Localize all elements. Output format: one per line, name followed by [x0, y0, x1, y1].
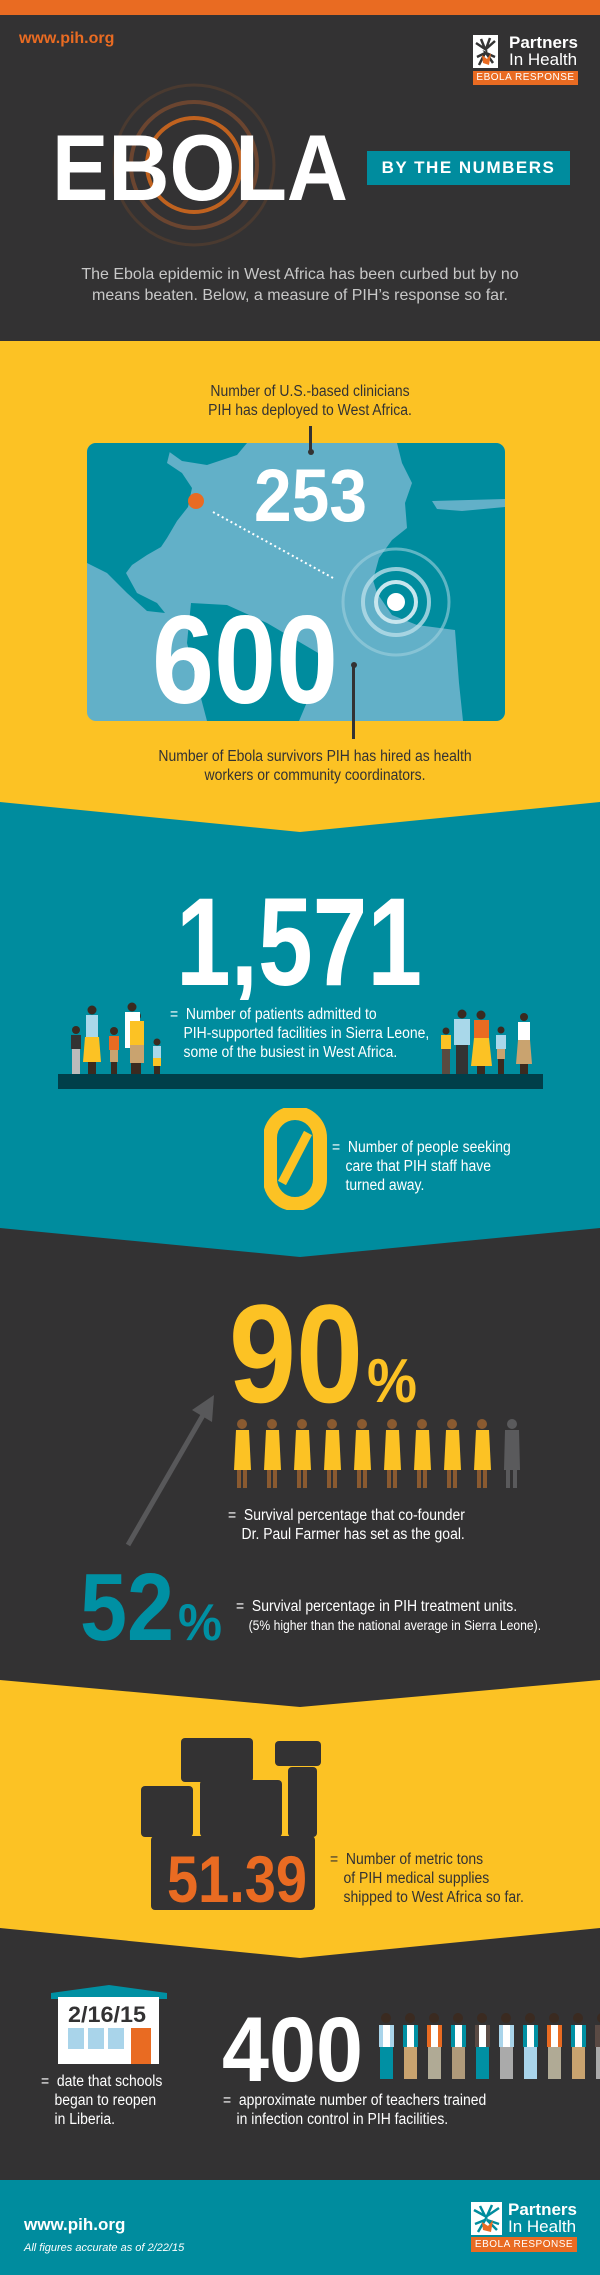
- badge: by the numbers: BY THE NUMBERS: [382, 158, 555, 177]
- text: clinicians: [208, 383, 412, 419]
- pointer line 253: [308, 426, 314, 455]
- arrow: [126, 1395, 214, 1546]
- text: metric tons: of PIH medical supplies: [344, 1870, 489, 1887]
- ground bar: [58, 1074, 543, 1089]
- text: 52 percent: [236, 1598, 541, 1633]
- text: patients admitted: [170, 1006, 429, 1061]
- text: schools reopen: began to reopen: [54, 2092, 156, 2109]
- text: survivors: workers or community coordinators.: [205, 767, 425, 784]
- intro text: The Ebola epidemic in West Africa has been curbed but by no means beaten. Below, a measure of PIH’s response so far.: [81, 266, 519, 304]
- text: schools reopen: [41, 2073, 162, 2128]
- text: zero turned away: turned away.: [346, 1177, 424, 1194]
- header url: www.pih.org: [19, 30, 114, 47]
- logo: footer: [471, 2200, 577, 2252]
- logo: header: [473, 33, 578, 85]
- figures row: 9 of 10 survive: [234, 1419, 520, 1488]
- text: teachers trained: [223, 2092, 486, 2128]
- text: 90 percent goal: [228, 1507, 465, 1543]
- text: clinicians: Number of U.S.-based clinicians: [210, 383, 410, 400]
- logo: header: In Health: [509, 50, 577, 69]
- text: metric tons: [330, 1851, 524, 1906]
- text: teachers trained: = approximate number of teachers trained: [223, 2092, 486, 2109]
- footer text: [24, 2215, 184, 2254]
- text: 90 percent goal: = Survival percentage that co-founder: [228, 1507, 465, 1524]
- logo: footer: In Health: [508, 2217, 576, 2236]
- text: zero turned away: care that PIH staff have: [346, 1158, 491, 1175]
- text: 52 percent: = Survival percentage in PIH treatment units.: [236, 1598, 517, 1615]
- pointer line 600: [351, 662, 357, 739]
- icon: school with date: 2/16/15: [68, 2002, 146, 2027]
- text: metric tons: = Number of metric tons: [330, 1851, 483, 1868]
- people group right: [441, 1010, 532, 1074]
- icon: supply boxes with 51.39: [141, 1738, 321, 1910]
- text: schools reopen: = date that schools: [41, 2073, 162, 2090]
- text: survivors: [158, 748, 472, 784]
- logo: footer: EBOLA RESPONSE: [475, 2239, 573, 2250]
- text: patients admitted: some of the busiest in West Africa.: [184, 1044, 397, 1061]
- footer text: All figures accurate as of 2/22/15: [24, 2242, 184, 2254]
- icon: school with date: [51, 1985, 167, 2064]
- text: metric tons: shipped to West Africa so far.: [344, 1889, 524, 1906]
- text: survivors: Number of Ebola survivors PIH has hired as health: [158, 748, 472, 765]
- text: clinicians: PIH has deployed to West Africa.: [208, 402, 412, 419]
- text: patients admitted: PIH-supported facilities in Sierra Leone,: [184, 1025, 429, 1042]
- title: EBOLA with rings: [52, 84, 348, 246]
- map panel: [87, 443, 505, 721]
- text: schools reopen: in Liberia.: [54, 2111, 115, 2128]
- footer text: www.pih.org: [24, 2215, 125, 2234]
- text: zero turned away: [332, 1139, 511, 1194]
- number 0: [264, 1108, 327, 1210]
- logo: footer: Partners: [508, 2200, 577, 2219]
- logo: header: EBOLA RESPONSE: [476, 72, 575, 83]
- text: zero turned away: = Number of people seeking: [332, 1139, 511, 1156]
- text: patients admitted: = Number of patients admitted to: [170, 1006, 377, 1023]
- logo: header: Partners: [509, 33, 578, 52]
- figures row: teachers: [379, 2013, 600, 2079]
- badge: by the numbers: [367, 151, 570, 185]
- text: 90 percent goal: Dr. Paul Farmer has set as the goal.: [242, 1526, 465, 1543]
- text: 52 percent: (5% higher than the national average in Sierra Leone).: [249, 1618, 541, 1633]
- people group left: [71, 1002, 161, 1074]
- text: teachers trained: in infection control in PIH facilities.: [236, 2111, 448, 2128]
